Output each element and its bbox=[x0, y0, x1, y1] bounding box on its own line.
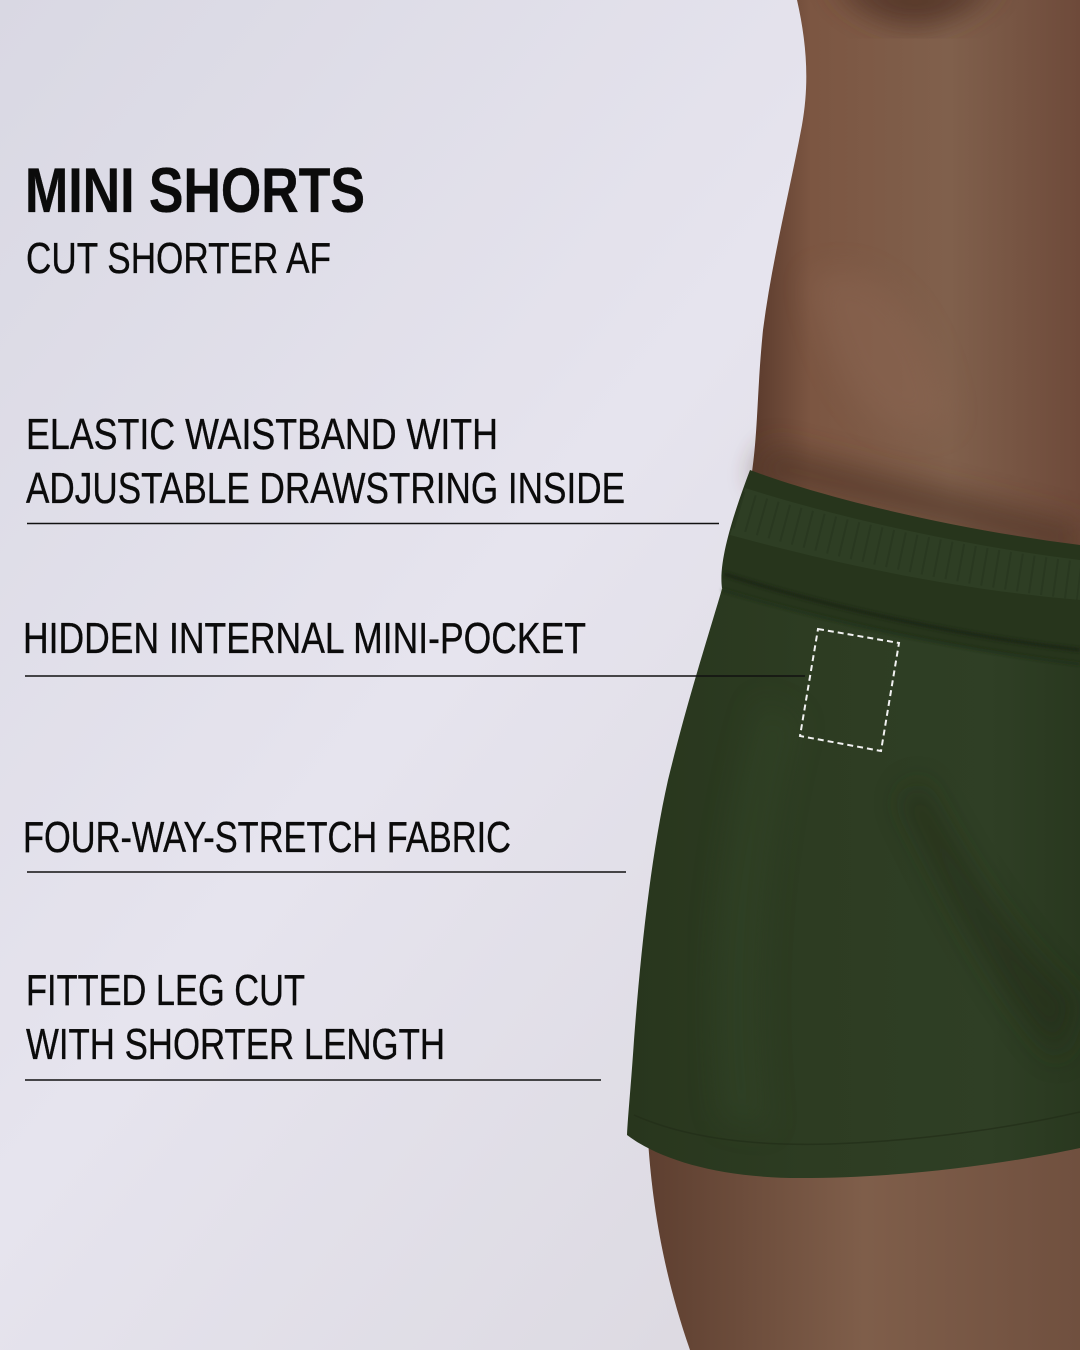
hem stitch bbox=[634, 1112, 1080, 1144]
callout: waistband bbox=[26, 410, 719, 524]
callout: pocket: HIDDEN INTERNAL MINI-POCKET bbox=[23, 614, 586, 663]
waistband bbox=[721, 470, 1080, 654]
pocket outline: dashed bbox=[800, 629, 899, 751]
callout: waistband: ADJUSTABLE DRAWSTRING INSIDE bbox=[26, 464, 625, 513]
shorts body bbox=[627, 575, 1080, 1178]
callout: fabric: FOUR-WAY-STRETCH FABRIC bbox=[23, 813, 511, 862]
photo: thigh bbox=[648, 1120, 1080, 1350]
callout: leg cut: WITH SHORTER LENGTH bbox=[26, 1020, 445, 1069]
callout: waistband: ELASTIC WAISTBAND WITH bbox=[26, 410, 498, 459]
callout: leg cut bbox=[25, 966, 601, 1080]
title: MINI SHORTS bbox=[25, 156, 365, 226]
subtitle: CUT SHORTER AF bbox=[26, 234, 331, 283]
photo: torso bbox=[752, 0, 1080, 600]
photo: green mini shorts bbox=[627, 460, 1080, 1178]
callout: leg cut: FITTED LEG CUT bbox=[26, 966, 305, 1015]
